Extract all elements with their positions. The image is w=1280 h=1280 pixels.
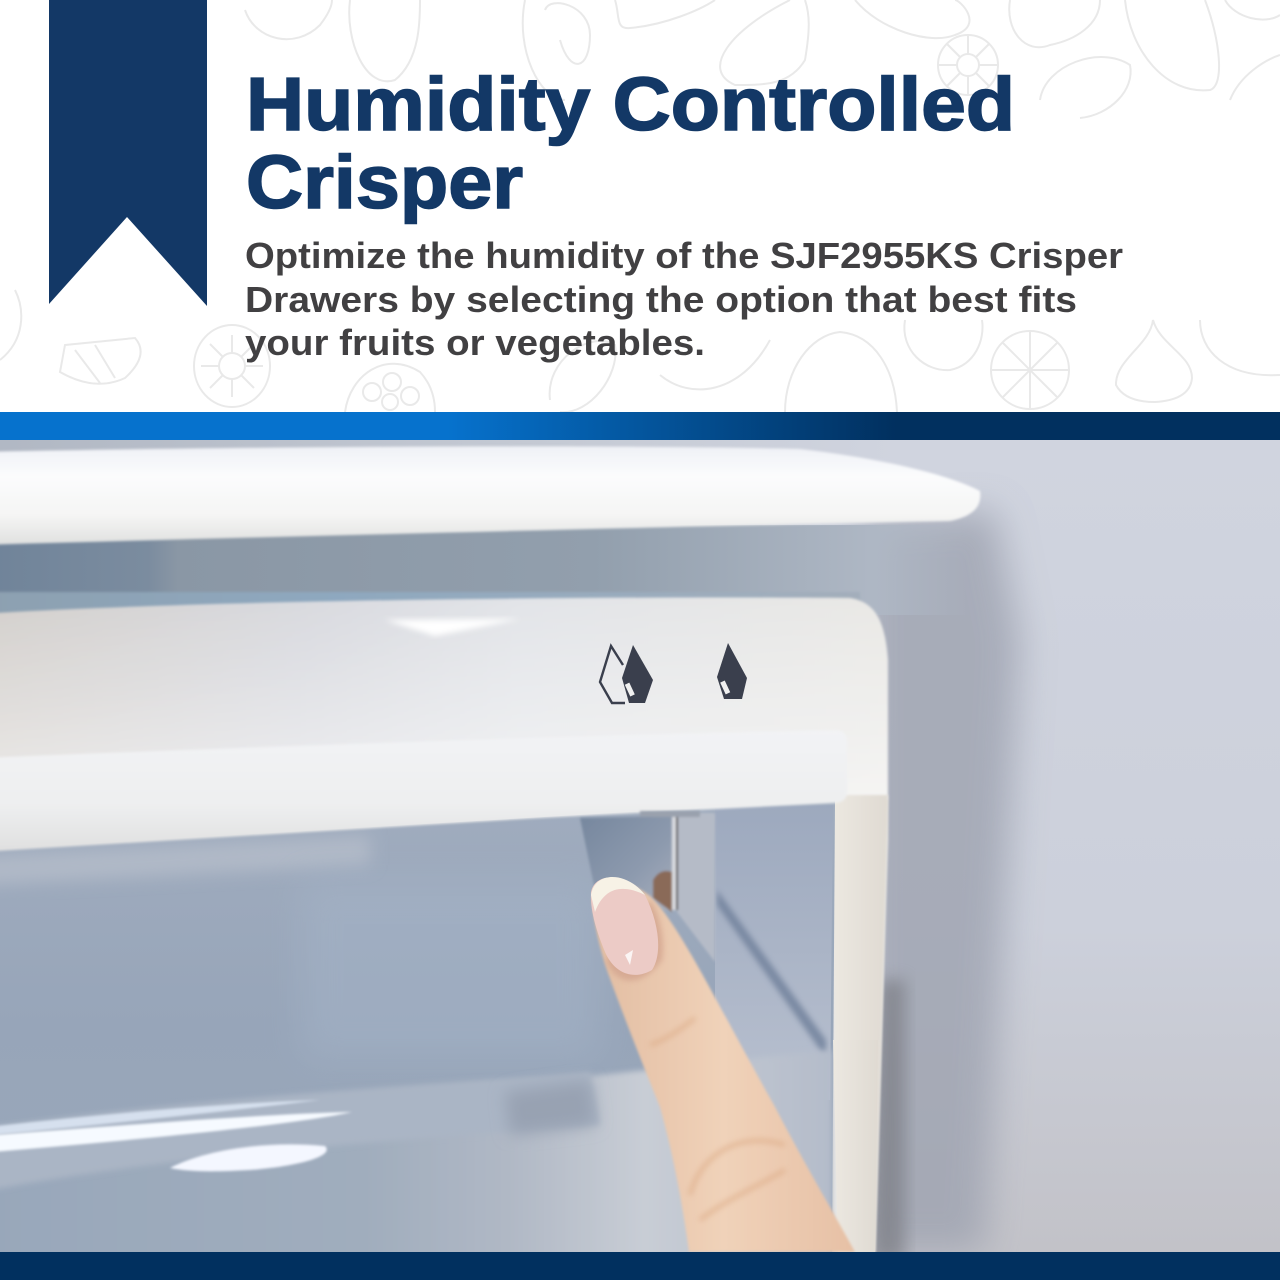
description text: Drawers by selecting the option that best fits bbox=[245, 279, 1077, 320]
description text: Optimize the humidity of the SJF2955KS Crisper bbox=[245, 235, 1123, 276]
top strip above lid bbox=[0, 438, 900, 458]
description text: your fruits or vegetables. bbox=[245, 322, 705, 363]
upper thin rail streak bbox=[0, 1100, 320, 1136]
nail glint bbox=[625, 950, 633, 965]
photo: finger pressing crisper humidity slider bbox=[0, 438, 1280, 1262]
title bbox=[246, 62, 1015, 224]
glass vertical sheen bbox=[300, 880, 600, 1060]
description text bbox=[245, 235, 1123, 363]
top shelf lid bbox=[0, 446, 980, 545]
nail bbox=[591, 877, 658, 975]
title: Humidity Controlled bbox=[246, 62, 1015, 146]
french tip bbox=[591, 877, 645, 912]
lower drawer section bbox=[0, 1050, 832, 1262]
blue reflection band bbox=[0, 592, 860, 620]
specular highlight on frame bbox=[385, 619, 520, 636]
compartment dark line bbox=[717, 890, 826, 1058]
gradient divider band bbox=[0, 412, 1280, 440]
nail shadow bbox=[606, 900, 663, 981]
frame right edge bbox=[832, 795, 888, 1262]
right compartment bbox=[715, 805, 833, 1100]
ribbon bookmark bbox=[49, 0, 207, 306]
dark shadow beside frame bbox=[870, 980, 905, 1262]
icon: single water drop (low humidity) bbox=[717, 643, 747, 699]
icon: double water drop (high humidity) bbox=[600, 645, 653, 703]
bottom band bbox=[0, 1252, 1280, 1280]
wall shadow bbox=[860, 510, 1020, 1252]
rail end shadow bbox=[505, 1080, 596, 1135]
header panel bbox=[0, 0, 1280, 412]
clear drawer front bbox=[0, 800, 835, 1252]
bright rail spot bbox=[170, 1144, 327, 1171]
title: Crisper bbox=[246, 140, 523, 224]
drawer frame bbox=[0, 598, 888, 1252]
knuckle creases bbox=[650, 1018, 785, 1220]
background fruit line pattern bbox=[0, 0, 1280, 412]
bright rail streak bbox=[0, 1112, 352, 1153]
drawer lip bar bbox=[0, 730, 847, 852]
drawer rail bbox=[0, 1072, 600, 1192]
frame side covers glass blur bbox=[833, 1040, 878, 1252]
upper gap behind the lid bbox=[0, 525, 970, 615]
finger bbox=[591, 877, 855, 1252]
chrome slider bbox=[580, 811, 715, 962]
lighter reflection on glass bbox=[0, 835, 370, 885]
